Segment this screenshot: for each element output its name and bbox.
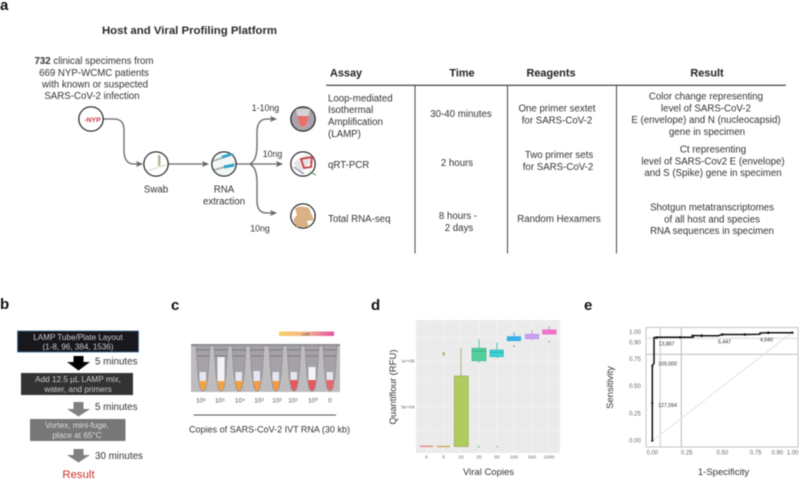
copy number labels (196, 396, 332, 404)
arrow: 5 minutes second: 5 minutes (95, 402, 138, 413)
y tick labels: 0.50 (629, 384, 641, 390)
y axis title: Sensitivity (605, 366, 616, 409)
x tick labels (425, 454, 555, 460)
threshold labels: 4,640 (760, 338, 773, 344)
table row: LAMP (328, 92, 781, 140)
x tick labels: 0.00 (646, 450, 659, 456)
table header: Time (449, 68, 475, 80)
step: plate layout: (1-8, 96, 384, 1536) (42, 342, 114, 352)
flow labels: RNA (214, 184, 235, 196)
copy number labels: 10⁵ (215, 398, 225, 404)
table row: LAMP: level of SARS-CoV-2 (661, 104, 751, 114)
table row: total RNA-seq: of all host and species (664, 214, 760, 226)
copy number labels: 10² (272, 398, 283, 404)
panel b: LAMP workflow (0, 296, 143, 480)
table row: LAMP: (LAMP) (328, 129, 361, 140)
y tick labels: 0.00 (629, 439, 641, 445)
table row: LAMP: gene in specimen (669, 127, 745, 138)
copy number labels: 10¹ (288, 398, 299, 404)
table row: LAMP: E (envelope) and N (nucleocapsid) (631, 115, 781, 126)
x tick labels: 50 (494, 454, 500, 460)
flow labels: extraction (203, 196, 245, 208)
y tick labels: 0.90 (629, 341, 641, 347)
copy number labels: 10⁶ (196, 398, 206, 404)
x tick labels: 0.75 (750, 450, 762, 456)
flow labels (144, 103, 282, 234)
icon: NYP hospital (79, 107, 103, 131)
threshold labels (658, 338, 773, 409)
y tick labels: 1e+05 (401, 358, 415, 364)
table row: qRT-PCR: Ct representing (680, 144, 746, 156)
arrow: 5 minutes second (67, 402, 138, 416)
table row: LAMP: One primer sextet (518, 104, 596, 114)
workflow arrows (103, 119, 282, 213)
step: plate layout: LAMP Tube/Plate Layout (33, 333, 123, 342)
icon: swab (144, 152, 168, 176)
x tick labels: 5 (442, 454, 445, 460)
table row: total RNA-seq: Total RNA-seq (328, 214, 390, 225)
icon: qRT-PCR plate (291, 152, 316, 176)
table row: total RNA-seq: RNA sequences in specimen (650, 226, 774, 237)
table row: qRT-PCR (328, 144, 785, 179)
tube liquid (199, 380, 334, 390)
plot background (416, 320, 560, 453)
table row: qRT-PCR: and S (Spike) gene in specimen (644, 168, 782, 179)
flow labels: 10ng (263, 149, 282, 159)
table row: qRT-PCR: for SARS-CoV-2 (523, 162, 593, 173)
copy number labels: 0 (328, 398, 332, 404)
table row: qRT-PCR: qRT-PCR (328, 160, 369, 171)
table row: qRT-PCR: level of SARS-Cov2 E (envelope) (641, 156, 785, 168)
panel c: LAMP tube colours (171, 297, 350, 434)
panel e: ROC curve (584, 297, 799, 478)
x tick labels: 500 (528, 454, 536, 460)
tube white interior (200, 357, 333, 381)
table row: qRT-PCR: 2 hours (441, 158, 473, 169)
flow labels: 1-10ng (252, 103, 279, 113)
icon: total RNA-seq (291, 204, 315, 228)
caption: Copies of SARS-CoV-2 IVT RNA (30 kb) (189, 424, 350, 434)
y axis title: Quantiflour (RFU) (388, 350, 399, 424)
table row: LAMP: for SARS-CoV-2 (522, 116, 592, 126)
y tick labels: 0.25 (629, 411, 641, 417)
flow labels: 10ng (250, 224, 270, 234)
flow labels: Swab (144, 184, 168, 196)
threshold labels: 109,000 (658, 362, 677, 368)
arrow: 5 minutes (67, 356, 138, 370)
tube ridges (196, 350, 337, 356)
step: plate layout (18, 331, 138, 352)
step: vortex: Vortex, mini-fuge, (45, 421, 109, 430)
x axis title: Viral Copies (463, 467, 514, 478)
step: vortex (30, 419, 126, 441)
table row: LAMP: Isothermal (328, 105, 373, 116)
y tick labels (629, 330, 641, 445)
icon: RNA extraction (212, 152, 236, 176)
copy number labels: 10³ (254, 398, 265, 404)
box plot (420, 326, 556, 448)
panel a: host and viral profiling platform (0, 0, 786, 254)
panel label d: d (371, 297, 380, 314)
threshold labels: 5,447 (718, 340, 731, 346)
LOD gradient bar: LOD (302, 332, 310, 336)
x tick labels: 25 (476, 454, 482, 460)
table row: qRT-PCR: Two primer sets (525, 150, 593, 161)
x axis title: 1-Specificity (698, 467, 749, 478)
specimen description: with known or suspected (41, 80, 148, 90)
y tick labels: 1.00 (629, 330, 641, 336)
step: add LAMP mix: Add 12.5 µL LAMP mix, (35, 375, 121, 384)
step: vortex: place at 65°C (52, 431, 102, 440)
panel label e: e (584, 297, 592, 314)
x tick labels: 0 (425, 454, 428, 460)
y tick labels: 5e+04 (401, 404, 415, 410)
icon: NYP hospital: -NYP (84, 117, 101, 124)
icon: LAMP tube (291, 107, 315, 131)
y tick labels: 0.75 (629, 357, 641, 363)
assay table (326, 68, 786, 254)
ROC curve (651, 331, 794, 442)
x tick labels: 1000 (544, 454, 555, 460)
x tick labels: 1.00 (787, 450, 799, 456)
threshold labels: 13,887 (659, 342, 675, 348)
table header (330, 68, 724, 80)
arrow: 30 minutes: 30 minutes (95, 451, 143, 462)
copy number labels: 10⁴ (235, 398, 245, 404)
table row: LAMP: Color change representing (649, 92, 763, 102)
table row: total RNA-seq: Shotgun metatranscriptomes (650, 202, 774, 214)
x tick labels: 0.90 (771, 450, 784, 456)
panel d: viral copies box plot (371, 297, 560, 478)
step: add LAMP mix: water, and primers (43, 385, 112, 394)
x tick labels: 10 (458, 454, 464, 460)
x tick labels: 0.50 (716, 450, 729, 456)
step: add LAMP mix (21, 373, 133, 395)
title: Host and Viral Profiling Platform (102, 25, 277, 37)
table row: total RNA-seq: 8 hours - (439, 211, 477, 222)
panel label c: c (171, 297, 179, 314)
x tick labels (646, 450, 799, 456)
tube photograph (191, 344, 340, 392)
arrow: 30 minutes (67, 449, 143, 462)
LOD gradient bar (279, 332, 334, 336)
specimen description: 669 NYP-WCMC patients (39, 68, 149, 79)
ROC plot area (646, 328, 798, 447)
table row: LAMP: Loop-mediated (328, 94, 393, 104)
specimen description: SARS-CoV-2 infection (44, 91, 140, 102)
x tick labels: 0.25 (681, 450, 693, 456)
table header: Reagents (526, 68, 576, 80)
threshold labels: 127,094 (658, 403, 677, 409)
panel label b: b (0, 296, 9, 313)
tubes (196, 345, 337, 391)
table row: total RNA-seq: 2 days (445, 223, 473, 234)
arrow: 5 minutes: 5 minutes (95, 356, 138, 368)
table row: total RNA-seq (328, 202, 774, 237)
table row: LAMP: 30-40 minutes (430, 109, 492, 120)
specimen description: 732 clinical specimens from (34, 56, 154, 67)
copy number labels: 10⁰ (308, 396, 318, 404)
table row: total RNA-seq: Random Hexamers (517, 214, 601, 225)
x tick labels: 100 (510, 454, 518, 460)
table header: Result (690, 68, 724, 80)
y tick labels (401, 358, 415, 410)
table row: LAMP: Amplification (328, 117, 383, 128)
table header: Assay (330, 68, 362, 80)
